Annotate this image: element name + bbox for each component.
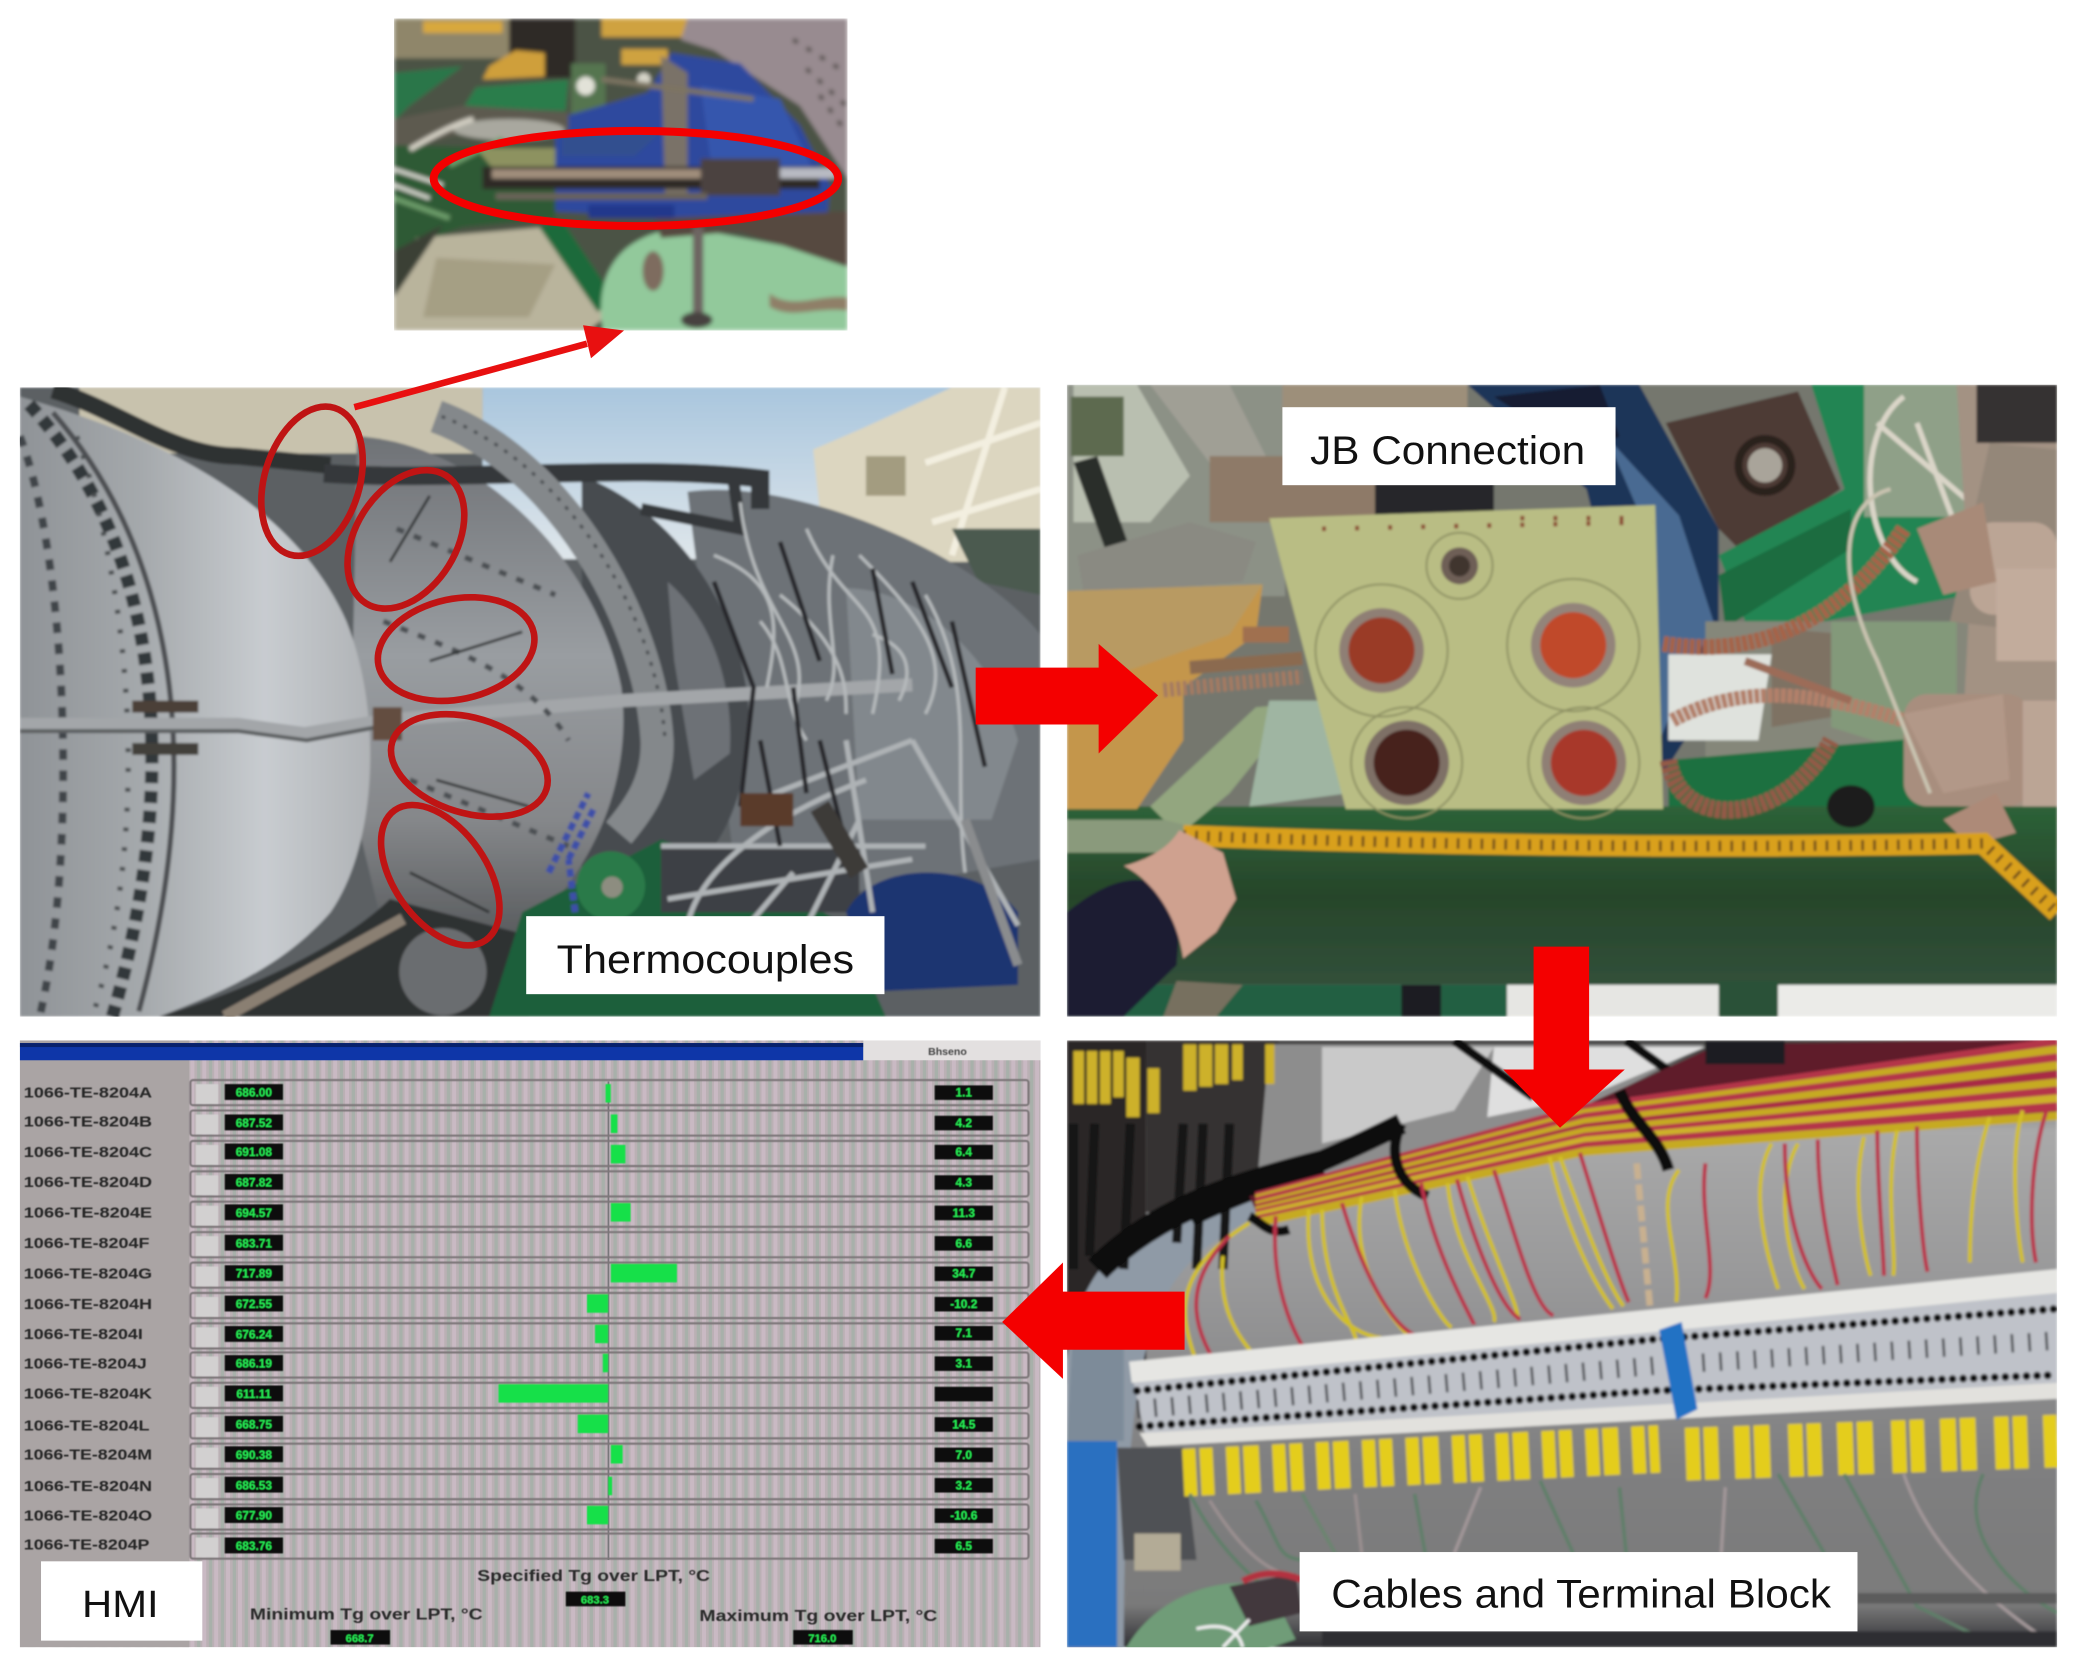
specified temperature readout: Specified Tg over LPT, °C xyxy=(477,1568,711,1585)
sensor rows table: 3.2 xyxy=(956,1478,972,1492)
sensor rows table: 1066-TE-8204P xyxy=(24,1537,150,1553)
sensor rows table: 686.19 xyxy=(236,1357,272,1371)
sensor rows table: 611.11 xyxy=(236,1387,272,1401)
sensor rows table: 6.5 xyxy=(956,1539,972,1553)
sensor rows table: 1066-TE-8204I xyxy=(24,1327,143,1343)
minimum temperature readout: Minimum Tg over LPT, °C xyxy=(250,1606,483,1623)
sensor rows table: 6.6 xyxy=(956,1236,972,1250)
sensor rows table: 1066-TE-8204J xyxy=(24,1356,147,1372)
sensor rows table: 672.55 xyxy=(236,1297,272,1311)
label: HMI xyxy=(41,1561,202,1641)
panel: thermocouple close-up photo xyxy=(394,19,847,331)
sensor rows table: 14.5 xyxy=(952,1417,976,1431)
sensor rows table: 1066-TE-8204C xyxy=(24,1145,153,1161)
lower wires xyxy=(1190,1474,2057,1639)
panel: HMI screen photo xyxy=(20,1040,1040,1647)
red wires xyxy=(1196,1111,2047,1375)
label: Cables and Terminal Block: Cables and Terminal Block xyxy=(1331,1573,1831,1617)
sensor rows table: 683.76 xyxy=(236,1539,272,1553)
sensor rows table: 1066-TE-8204A xyxy=(24,1085,153,1101)
sensor rows table xyxy=(24,1080,1029,1559)
sensor rows table: 34.7 xyxy=(952,1267,976,1281)
sensor rows table: 683.71 xyxy=(236,1236,272,1250)
label: JB Connection: JB Connection xyxy=(1310,429,1585,473)
sensor rows table: 690.38 xyxy=(236,1448,272,1462)
sensor rows table: 1066-TE-8204B xyxy=(24,1114,152,1130)
sensor rows table: 687.52 xyxy=(236,1116,272,1130)
specified temperature readout xyxy=(477,1568,711,1607)
red ellipse: thermocouple 4 xyxy=(388,710,551,820)
minimum temperature readout: 668.7 xyxy=(346,1633,374,1645)
sensor rows table: 1.1 xyxy=(956,1086,972,1100)
label: HMI: HMI xyxy=(82,1583,159,1626)
sensor rows table: 6.4 xyxy=(956,1145,972,1159)
sensor rows table: 1066-TE-8204E xyxy=(24,1206,152,1222)
sensor rows table: 1066-TE-8204F xyxy=(24,1236,150,1252)
arrow: terminal block to HMI xyxy=(1002,1263,1185,1379)
red ellipse: thermocouple 2 xyxy=(344,466,468,612)
specified temperature readout: 683.3 xyxy=(581,1595,609,1607)
sensor rows table: 1066-TE-8204M xyxy=(24,1448,152,1464)
sensor rows table: 677.90 xyxy=(236,1509,272,1523)
sensor rows table: 1066-TE-8204L xyxy=(24,1418,150,1434)
centre reference line xyxy=(608,1081,609,1560)
sensor rows table: 11.3 xyxy=(953,1206,975,1220)
sensor rows table: 7.1 xyxy=(956,1326,972,1340)
sensor rows table: 4.2 xyxy=(956,1116,972,1130)
sensor rows table: -10.6 xyxy=(950,1509,978,1523)
sensor rows table: 694.57 xyxy=(236,1206,272,1220)
sensor rows table: 1066-TE-8204N xyxy=(24,1479,152,1495)
label: Thermocouples xyxy=(526,916,884,994)
sensor rows table: 691.08 xyxy=(236,1145,272,1159)
maximum temperature readout: 716.0 xyxy=(808,1633,836,1645)
HMI title bar xyxy=(20,1040,1040,1060)
arrow: from turbine to close-up xyxy=(354,325,624,407)
wire bundle xyxy=(1249,1039,2057,1226)
sensor rows table: 1066-TE-8204D xyxy=(24,1175,152,1191)
sensor rows table: 686.00 xyxy=(236,1086,272,1100)
sensor rows table: 686.53 xyxy=(236,1478,272,1492)
red ellipse: thermocouple 5 xyxy=(378,802,503,949)
red ellipse: thermocouple 1 xyxy=(258,403,366,560)
terminal block xyxy=(1133,1292,2057,1434)
sensor rows table: 3.1 xyxy=(956,1357,972,1371)
label: JB Connection xyxy=(1282,407,1616,485)
label: Cables and Terminal Block xyxy=(1300,1552,1857,1631)
sensor rows table: 4.3 xyxy=(956,1176,972,1190)
yellow cable markers xyxy=(1183,1441,2057,1473)
sensor rows table: 7.0 xyxy=(956,1448,972,1462)
red ellipse: thermocouple 3 xyxy=(374,594,538,704)
sensor rows table: 1066-TE-8204H xyxy=(24,1297,152,1313)
HMI title bar: Bhseno xyxy=(928,1046,967,1058)
arrow: JB connection to terminal block xyxy=(1503,947,1625,1128)
panel: JB connection photo xyxy=(1067,385,2057,1017)
sensor rows table: 687.82 xyxy=(236,1176,272,1190)
yellow wires xyxy=(1185,1111,2023,1372)
panel: cables and terminal block photo xyxy=(1067,1039,2057,1653)
sensor rows table: 1066-TE-8204G xyxy=(24,1266,152,1282)
highlight ellipse on thermocouple xyxy=(434,131,838,226)
sensor rows table: 668.75 xyxy=(236,1417,272,1431)
sensor rows table: 1066-TE-8204O xyxy=(24,1508,152,1524)
maximum temperature readout: Maximum Tg over LPT, °C xyxy=(699,1608,938,1625)
panel: thermocouples on gas turbine photo xyxy=(20,387,1040,1017)
sensor rows table: 676.24 xyxy=(236,1328,272,1342)
minimum temperature readout xyxy=(250,1606,483,1645)
sensor rows table: 1066-TE-8204K xyxy=(24,1387,153,1403)
sensor rows table: -10.2 xyxy=(950,1297,978,1311)
label: Thermocouples: Thermocouples xyxy=(557,938,854,982)
arrow: turbine to JB connection xyxy=(976,644,1158,754)
sensor rows table: 717.89 xyxy=(236,1267,272,1281)
maximum temperature readout xyxy=(699,1608,938,1645)
